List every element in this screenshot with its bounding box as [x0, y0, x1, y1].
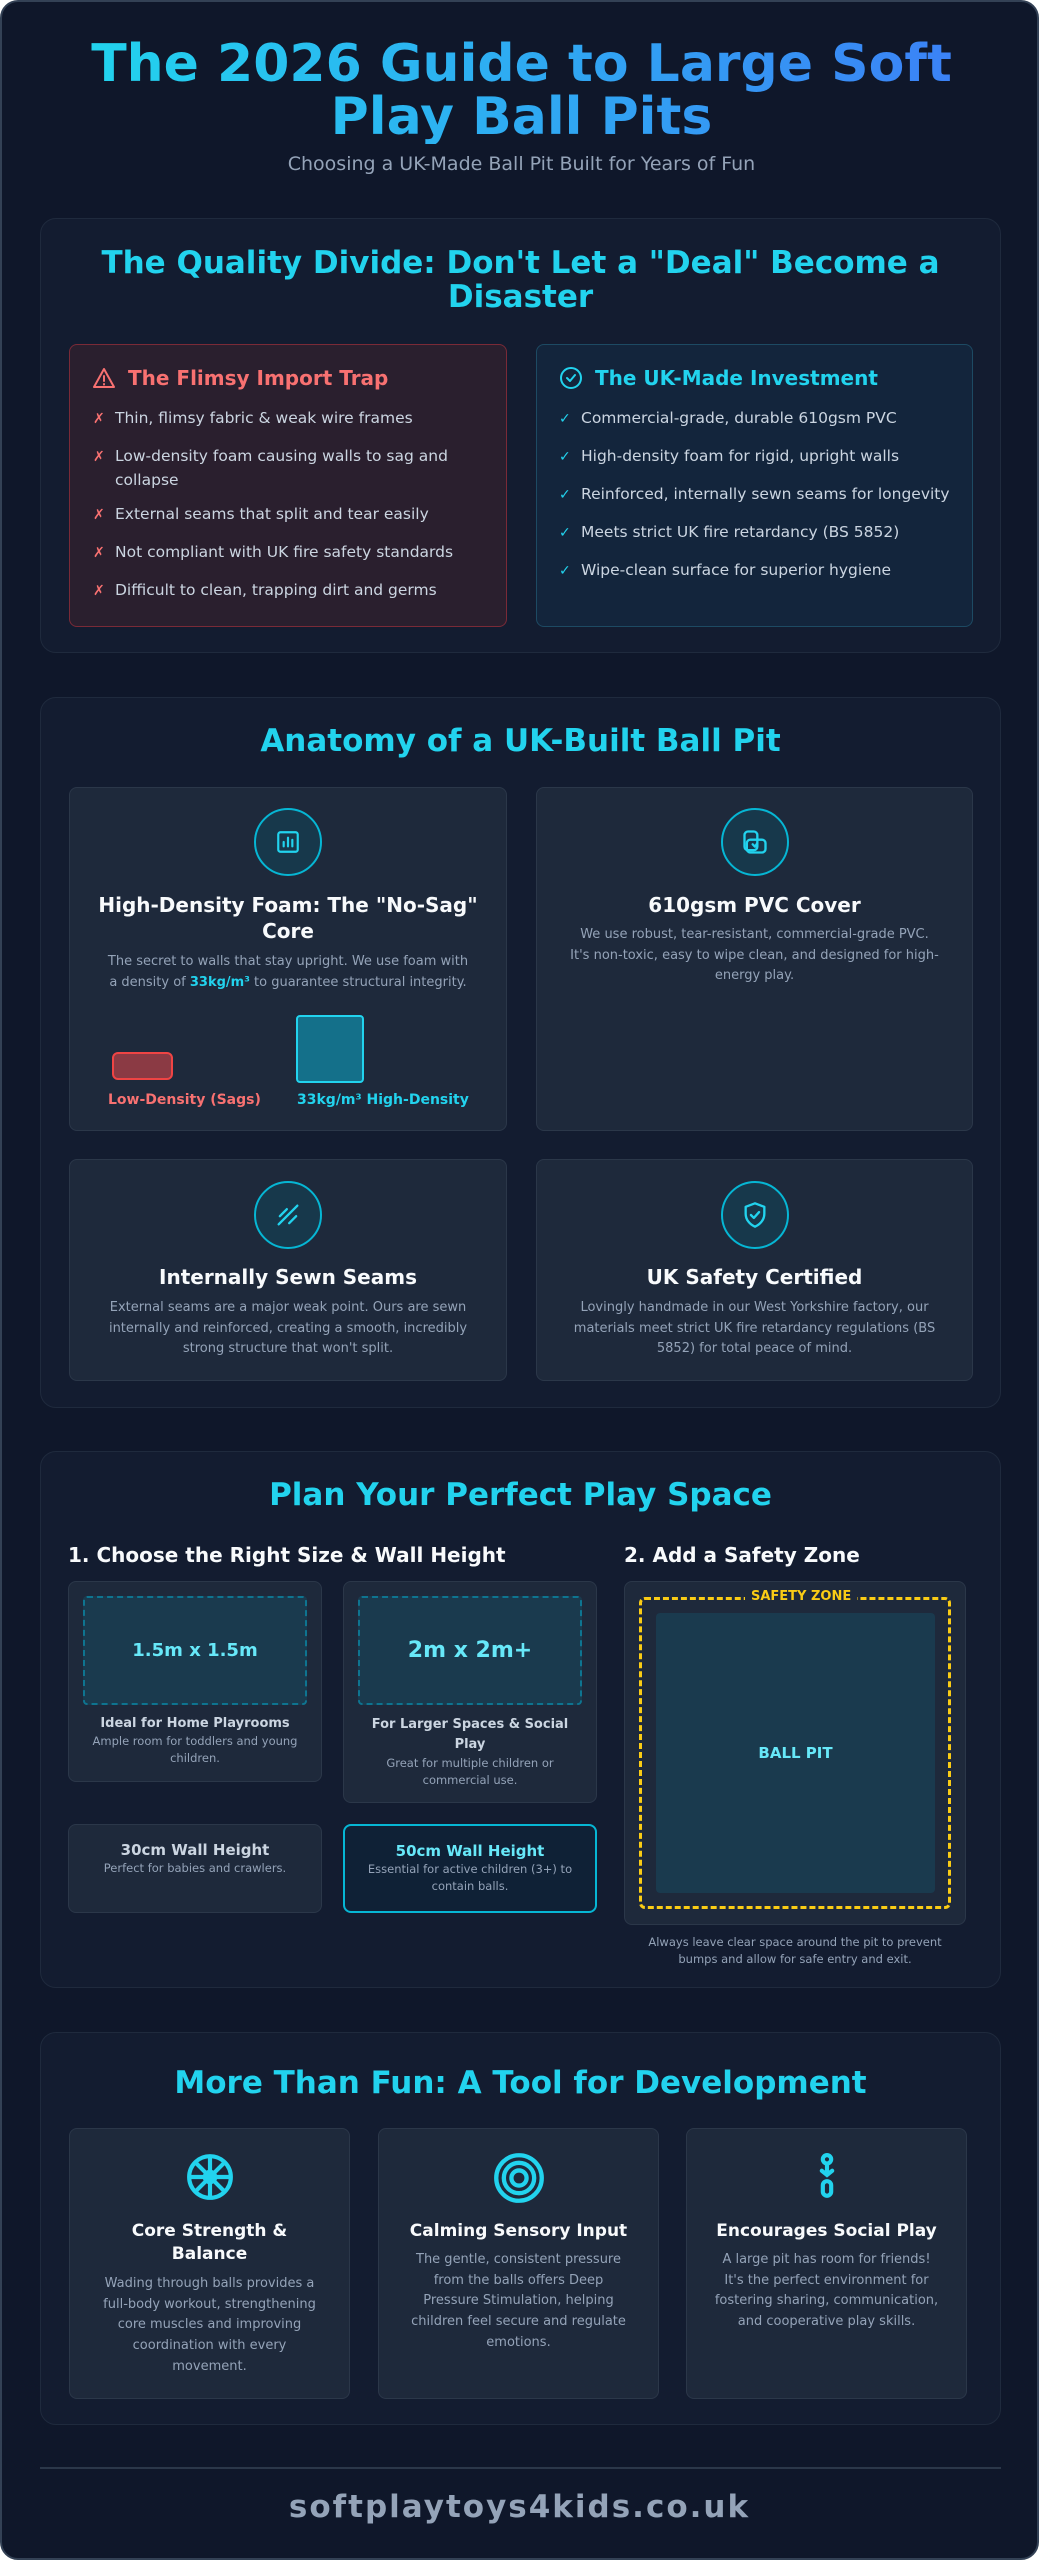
card: UK-made investment: ✓	[559, 449, 571, 465]
desc: social: A large pit has room for friends!	[722, 2252, 931, 2267]
heading: UK-made: The UK-Made Investment	[595, 366, 878, 390]
heading: quality divide	[101, 245, 940, 315]
card: safety zone diagram	[624, 1581, 966, 1925]
list: UK-made items: Meets strict UK fire retardancy (BS 5852)	[581, 523, 899, 541]
subheading: size: 1. Choose the Right Size & Wall Height	[68, 1543, 506, 1567]
desc: seams	[109, 1300, 467, 1356]
desc: sensory: from the balls offers Deep	[434, 2273, 603, 2288]
desc: PVC: It's non-toxic, easy to wipe clean, and designed for high-	[570, 948, 939, 963]
card: core strength	[69, 2128, 350, 2399]
heading: development: More Than Fun: A Tool for Development	[174, 2065, 867, 2101]
ball pit: BALL PIT	[758, 1744, 833, 1762]
desc: PVC: energy play.	[715, 968, 794, 983]
title: core: Core Strength &	[132, 2221, 287, 2241]
card: 30cm: 30cm Wall Height	[121, 1841, 269, 1859]
size box 2m: 2m x 2m+	[408, 1638, 532, 1663]
desc: certified: 5852) for total peace of mind.	[657, 1341, 852, 1356]
title: foam: High-Density Foam: The "No-Sag"	[98, 893, 478, 917]
desc: sensory: emotions.	[486, 2335, 551, 2350]
heading: flimsy: The Flimsy Import Trap	[128, 366, 388, 390]
list: flimsy items: Not compliant with UK fire safety standards	[115, 543, 453, 561]
desc: sensory: The gentle, consistent pressure	[416, 2252, 621, 2267]
icon: PVC	[721, 808, 789, 876]
caption: safety: Always leave clear space around the pit to prevent	[648, 1935, 942, 1949]
label: safety zone: SAFETY ZONE	[751, 1589, 851, 1604]
desc: social: and cooperative play skills.	[738, 2314, 915, 2329]
chart: density comparison	[108, 1015, 469, 1108]
card: 50cm: 50cm Wall Height	[396, 1842, 544, 1860]
card: UK-made investment: ✓	[559, 563, 571, 579]
card: flimsy import trap	[69, 344, 507, 627]
heading: plan: Plan Your Perfect Play Space	[269, 1477, 772, 1513]
desc: foam	[108, 954, 468, 990]
title	[91, 34, 952, 147]
title: PVC: 610gsm PVC Cover	[648, 893, 861, 917]
icon: social figure	[820, 2153, 834, 2198]
desc: sensory: children feel secure and regulate	[411, 2314, 626, 2329]
text: home playrooms: children.	[170, 1751, 220, 1765]
list: flimsy items	[93, 409, 453, 599]
icon: concentric circles	[494, 2153, 544, 2203]
text: larger spaces: Great for multiple children or	[386, 1756, 554, 1770]
panel: plan play space	[40, 1451, 1001, 1988]
icon: wheel	[187, 2154, 233, 2200]
subtitle: Choosing a UK-Made Ball Pit Built for Years of Fun	[288, 153, 755, 175]
card: UK-made investment	[536, 344, 973, 627]
heading: quality divide: The Quality Divide: Don't Let a "Deal" Become a	[101, 245, 940, 281]
desc: certified: materials meet strict UK fire retardancy regulations (BS	[574, 1321, 935, 1336]
text: larger spaces: commercial use.	[423, 1773, 517, 1787]
card: seams	[69, 1159, 507, 1381]
card: flimsy import trap: ✗	[93, 545, 105, 561]
desc: foam: The secret to walls that stay upright. We use foam with	[108, 954, 468, 969]
card: flimsy import trap: ✗	[93, 411, 105, 427]
title: foam: Core	[262, 919, 314, 943]
panel: development	[40, 2032, 1001, 2425]
title: The 2026 Guide to Large Soft	[91, 34, 952, 94]
card: UK-made investment: ✓	[559, 525, 571, 541]
desc: PVC: We use robust, tear-resistant, commercial-grade PVC.	[580, 927, 929, 942]
desc: social	[715, 2252, 938, 2329]
card: 30cm	[68, 1824, 322, 1913]
icon: warning	[93, 368, 115, 388]
text: larger spaces: For Larger Spaces & Social	[372, 1717, 568, 1732]
desc: core	[103, 2276, 316, 2374]
caption: safety	[648, 1935, 942, 1966]
panel: anatomy	[40, 697, 1001, 1408]
ball pit	[656, 1613, 935, 1893]
card: flimsy import trap: ✗	[93, 449, 105, 465]
title: certified: UK Safety Certified	[647, 1265, 862, 1289]
text: home playrooms: Ideal for Home Playrooms	[100, 1716, 290, 1731]
safety zone border	[639, 1597, 951, 1909]
text: home playrooms	[92, 1716, 297, 1765]
card: 50cm: contain balls.	[432, 1879, 508, 1893]
icon: chart	[254, 808, 322, 876]
desc: core: core muscles and improving	[118, 2317, 301, 2332]
card: 30cm: Perfect for babies and crawlers.	[104, 1861, 286, 1875]
text: home playrooms: Ample room for toddlers and young	[93, 1734, 297, 1748]
card: 50cm	[343, 1824, 597, 1913]
desc: seams: strong structure that won't split.	[183, 1341, 393, 1356]
desc: seams: internally and reinforced, creating a smooth, incredibly	[109, 1321, 467, 1336]
desc: core: Wading through balls provides a	[105, 2276, 314, 2291]
card: safety certified	[536, 1159, 973, 1381]
title: core: Balance	[172, 2244, 247, 2264]
desc: social: It's the perfect environment for	[724, 2273, 929, 2288]
card: social	[686, 2128, 967, 2399]
title: seams: Internally Sewn Seams	[159, 1265, 417, 1289]
card: UK-made investment: ✓	[559, 487, 571, 503]
desc: core: movement.	[172, 2359, 247, 2374]
desc: PVC	[570, 927, 939, 983]
panel: quality divide	[40, 218, 1001, 653]
heading: quality divide: Disaster	[448, 279, 593, 315]
size box 1.5m	[83, 1596, 307, 1705]
card: high-density foam	[69, 787, 507, 1131]
heading: anatomy: Anatomy of a UK-Built Ball Pit	[260, 723, 781, 759]
list: flimsy items: Thin, flimsy fabric & weak wire frames	[115, 409, 413, 427]
text: larger spaces: Play	[455, 1737, 485, 1752]
list: UK-made items: High-density foam for rigid, upright walls	[581, 447, 899, 465]
text: larger spaces	[372, 1717, 568, 1787]
chart: density comparison: 33kg/m³ High-Density	[297, 1092, 469, 1108]
desc: foam: a density of 33kg/m³ to guarantee structural integrity.	[109, 975, 467, 990]
list: UK-made items	[559, 409, 950, 579]
card: flimsy import trap: ✗	[93, 583, 105, 599]
footer: softplaytoys4kids.co.uk	[289, 2489, 750, 2525]
size box 1.5m: 1.5m x 1.5m	[132, 1640, 258, 1661]
desc: certified: Lovingly handmade in our West Yorkshire factory, our	[580, 1300, 929, 1315]
card: PVC cover	[536, 787, 973, 1131]
list: flimsy items: Low-density foam causing walls to sag and collapse	[115, 447, 448, 489]
title: foam	[98, 893, 478, 943]
icon: check circle	[560, 367, 582, 389]
list: flimsy items: External seams that split and tear easily	[115, 505, 429, 523]
card: UK-made investment: ✓	[559, 411, 571, 427]
desc: social: fostering sharing, communication,	[715, 2293, 938, 2308]
desc: sensory	[411, 2252, 626, 2350]
title: social: Encourages Social Play	[716, 2221, 937, 2241]
card: flimsy import trap: ✗	[93, 507, 105, 523]
title: Play Ball Pits	[331, 87, 712, 147]
card: 1.5m	[68, 1581, 322, 1782]
icon: shield	[721, 1181, 789, 1249]
desc: certified	[574, 1300, 935, 1356]
list: UK-made items: Wipe-clean surface for superior hygiene	[581, 561, 891, 579]
card: sensory	[378, 2128, 659, 2399]
title: core	[132, 2221, 287, 2264]
desc: sensory: Pressure Stimulation, helping	[423, 2293, 614, 2308]
desc: core: coordination with every	[133, 2338, 286, 2353]
title: sensory: Calming Sensory Input	[410, 2221, 627, 2241]
subheading: safety: 2. Add a Safety Zone	[624, 1543, 860, 1567]
icon: seams	[254, 1181, 322, 1249]
list: UK-made items: Commercial-grade, durable 610gsm PVC	[581, 409, 897, 427]
size box 2m	[358, 1596, 582, 1705]
desc: seams: External seams are a major weak point. Ours are sewn	[110, 1300, 466, 1315]
card: 2m	[343, 1581, 597, 1803]
list: UK-made items: Reinforced, internally sewn seams for longevity	[581, 485, 950, 503]
chart: density comparison: Low-Density (Sags)	[108, 1092, 261, 1108]
card: 50cm: Essential for active children (3+) to	[368, 1862, 572, 1876]
list: flimsy items: Difficult to clean, trapping dirt and germs	[115, 581, 437, 599]
caption: safety: bumps and allow for safe entry and exit.	[678, 1952, 912, 1966]
desc: core: full-body workout, strengthening	[103, 2297, 316, 2312]
